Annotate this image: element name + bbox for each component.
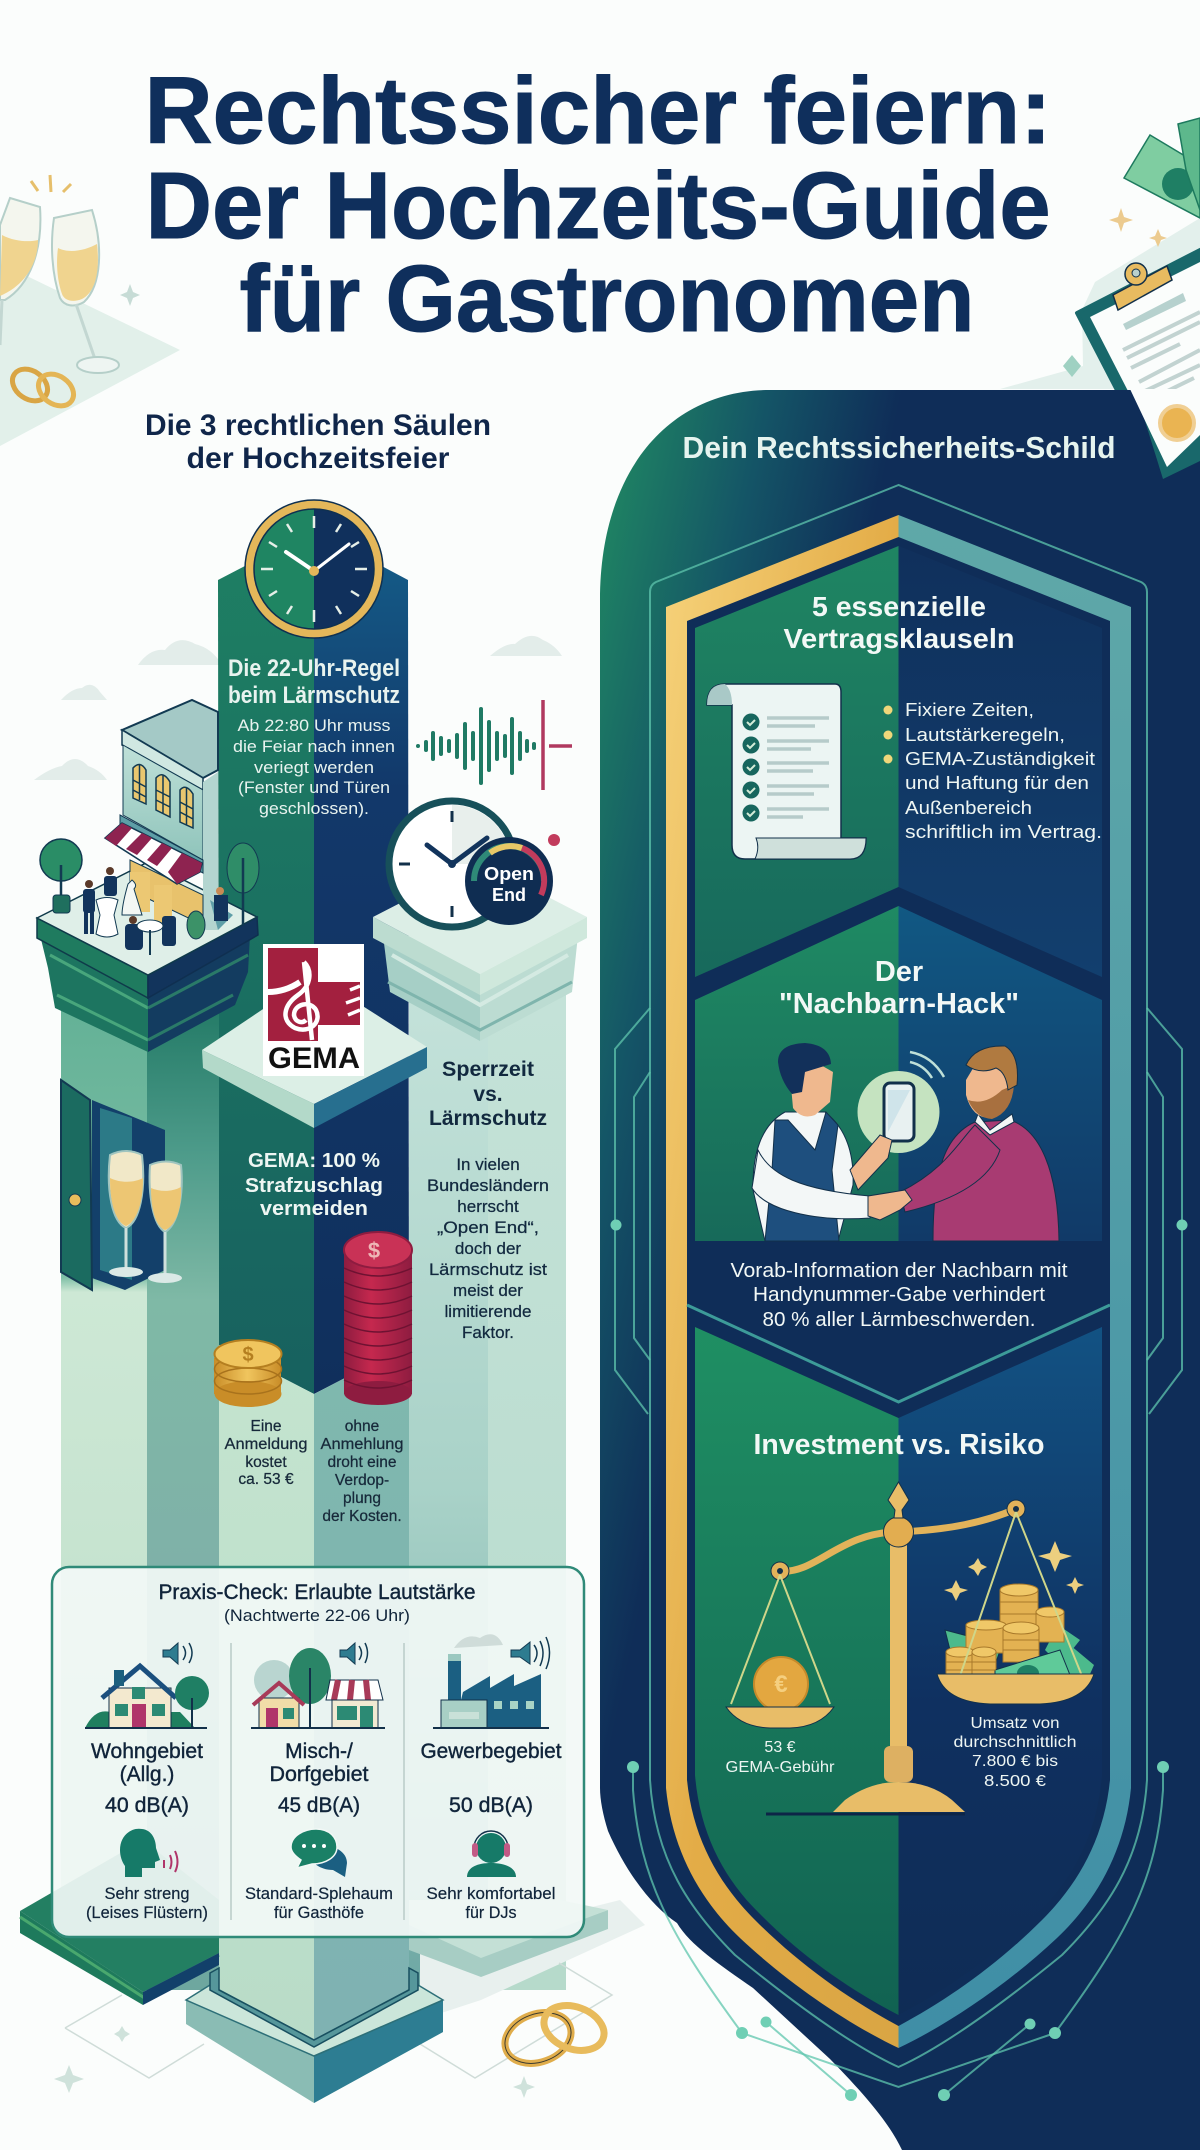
icon: gold coin stack: $	[242, 1344, 254, 1366]
text: area names and limits: für DJs	[466, 1904, 516, 1922]
decoration: champagne glasses and rings top left	[0, 175, 180, 446]
text: Sperrzeit vs. Lärmschutz: doch der	[455, 1239, 521, 1258]
icon: clock with Open End badge: Open	[484, 864, 534, 884]
text: Sperrzeit vs. Lärmschutz: Bundesländern	[427, 1176, 549, 1195]
text: 22-Uhr-Regel: geschlossen).	[259, 799, 369, 818]
text: GEMA Strafzuschlag: GEMA: 100 %	[248, 1150, 380, 1172]
text: area names and limits: 45 dB(A)	[278, 1794, 360, 1817]
text: scale captions: durchschnittlich	[954, 1734, 1076, 1751]
text: section heading: 5 essenzielle	[812, 591, 986, 622]
logo: GEMA	[263, 944, 364, 1076]
text: scale captions	[726, 1715, 1076, 1790]
text: 22-Uhr-Regel: (Fenster und Türen	[238, 778, 390, 797]
pillar: right (Sperrzeit)	[373, 862, 587, 1990]
title	[144, 58, 1052, 352]
shield border: teal right half	[898, 515, 1131, 2048]
text: scale captions: 7.800 € bis	[972, 1753, 1058, 1770]
heading: Rechtssicherheits-Schild: Dein Rechtssicherheits-Schild	[682, 430, 1116, 465]
text: area names and limits: Dorfgebiet	[270, 1763, 369, 1786]
text: coin captions: Anmehlung	[320, 1436, 404, 1453]
heading: three pillars: Die 3 rechtlichen Säulen	[145, 409, 491, 442]
text: area names and limits: Gewerbegebiet	[420, 1740, 562, 1763]
text: clause bullet points: Lautstärkeregeln,	[905, 724, 1065, 745]
text: section heading: "Nachbarn-Hack"	[779, 988, 1019, 1020]
illustration: handshake with neighbor	[752, 1043, 1059, 1241]
text: clause bullet points: Außenbereich	[905, 797, 1032, 818]
illustration: balance scale: €	[774, 1671, 788, 1698]
text: neighbor tip: Handynummer-Gabe verhindert	[753, 1284, 1045, 1306]
text: scale captions: GEMA-Gebühr	[726, 1759, 835, 1776]
heading: Praxis-Check: (Nachtwerte 22-06 Uhr)	[224, 1607, 410, 1625]
text: area names and limits: (Leises Flüstern)	[86, 1904, 208, 1922]
text: coin captions: droht eine	[328, 1454, 396, 1471]
text: GEMA Strafzuschlag: Strafzuschlag	[245, 1175, 383, 1197]
text: Sperrzeit vs. Lärmschutz: Lärmschutz	[429, 1107, 547, 1130]
text: clause bullet points: Fixiere Zeiten,	[905, 699, 1034, 720]
pillar: left with doorway	[37, 862, 258, 1990]
money pile	[944, 1512, 1094, 1695]
clipboard corner overlapping panel	[1130, 389, 1200, 479]
clouds	[34, 636, 562, 780]
shield section: Nachbarn-Hack	[695, 906, 1102, 1331]
text: section heading	[779, 956, 1019, 1020]
logo: GEMA: GEMA	[268, 1042, 360, 1075]
text: clause bullet points: schriftlich im Vertrag.	[905, 821, 1102, 842]
text: coin captions: Eine	[250, 1418, 282, 1435]
shield section: Vertragsklauseln	[695, 546, 1102, 977]
icon: chat bubbles	[291, 1829, 347, 1877]
icon: red coin stack: $	[368, 1238, 380, 1263]
panel: Praxis-Check volume table	[52, 1567, 584, 1937]
text: Sperrzeit vs. Lärmschutz: „Open End“,	[437, 1218, 539, 1237]
text: 22-Uhr-Regel: Die 22-Uhr-Regel	[228, 655, 400, 682]
shield section: Investment vs. Risiko	[695, 1327, 1102, 2015]
text: coin captions: plung	[343, 1490, 381, 1507]
text: Sperrzeit vs. Lärmschutz: Faktor.	[462, 1323, 514, 1342]
text: area names and limits: Sehr komfortabel	[426, 1885, 556, 1903]
circuit lines around the shield	[615, 485, 1182, 2095]
text: clause bullet points: und Haftung für den	[905, 772, 1089, 793]
icon: residential house with tree	[85, 1643, 209, 1728]
text: coin captions: ohne	[345, 1418, 379, 1435]
heading: Praxis-Check: Praxis-Check: Erlaubte Lautstärke	[158, 1581, 476, 1604]
decoration: money and clipboard top right	[1000, 118, 1200, 479]
text: coin captions: kostet	[245, 1454, 287, 1471]
heading: three pillars: der Hochzeitsfeier	[186, 442, 450, 475]
text: coin captions: Verdop-	[335, 1472, 389, 1489]
text: 22-Uhr-Regel: Ab 22:80 Uhr muss	[238, 716, 390, 735]
doorway with door and glasses	[61, 1080, 182, 1290]
text: clause bullet points	[884, 699, 1102, 842]
text: coin captions: ca. 53 €	[238, 1471, 294, 1488]
text: area names and limits: Wohngebiet	[91, 1740, 203, 1763]
text: area names and limits: 50 dB(A)	[449, 1794, 533, 1817]
text: scale captions: Umsatz von	[970, 1715, 1060, 1732]
illustration: restaurant with terrace	[40, 700, 259, 955]
decoration: bottom rings and sparkles	[54, 1998, 610, 2098]
text: section heading	[784, 591, 1014, 654]
text: area names and limits	[86, 1740, 562, 1922]
icon: red coin stack	[344, 1232, 412, 1405]
icon: clock 22 Uhr	[245, 500, 383, 638]
text: coin captions	[224, 1418, 404, 1525]
text: neighbor tip: Vorab-Information der Nachbarn mit	[730, 1260, 1068, 1282]
text: Sperrzeit vs. Lärmschutz: meist der	[453, 1281, 523, 1300]
text: 22-Uhr-Regel	[228, 655, 400, 818]
heading: three pillars	[145, 409, 491, 475]
icon: gold coin stack	[214, 1340, 282, 1407]
text: Sperrzeit vs. Lärmschutz: vs.	[473, 1083, 503, 1106]
text: clause bullet points: GEMA-Zuständigkeit	[905, 748, 1095, 769]
icon: sound wave	[418, 700, 572, 790]
text: 22-Uhr-Regel: veriegt werden	[254, 758, 374, 777]
illustration: GEMA capital	[202, 975, 427, 1128]
heading: Praxis-Check	[158, 1581, 476, 1625]
icon: DJ headset	[467, 1831, 516, 1877]
text: Sperrzeit vs. Lärmschutz	[427, 1058, 549, 1342]
text: coin captions: der Kosten.	[322, 1508, 402, 1525]
text: GEMA Strafzuschlag	[245, 1150, 383, 1220]
shield	[666, 515, 1131, 2048]
text: Sperrzeit vs. Lärmschutz: Lärmschutz ist	[429, 1260, 547, 1279]
icon: whispering head	[120, 1829, 178, 1877]
text: Sperrzeit vs. Lärmschutz: limitierende	[445, 1302, 531, 1321]
text: scale captions: 53 €	[764, 1739, 796, 1756]
panel: Rechtssicherheits-Schild background	[600, 390, 1200, 2150]
circuit nodes	[610, 1220, 1188, 2101]
pillar: center lower	[219, 1345, 409, 2040]
text: Sperrzeit vs. Lärmschutz: In vielen	[456, 1155, 520, 1174]
text: section heading: Investment vs. Risiko	[754, 1429, 1044, 1461]
text: Sperrzeit vs. Lärmschutz: herrscht	[457, 1197, 519, 1216]
title: Rechtssicher feiern:	[144, 58, 1052, 164]
text: area names and limits: Misch-/	[285, 1740, 353, 1763]
text: area names and limits: für Gasthöfe	[274, 1904, 364, 1922]
title: Der Hochzeits-Guide	[146, 153, 1050, 259]
text: section heading: Der	[875, 956, 923, 988]
text: area names and limits: Sehr streng	[104, 1885, 190, 1903]
text: neighbor tip: 80 % aller Lärmbeschwerden.	[762, 1309, 1036, 1331]
text: scale captions: 8.500 €	[984, 1773, 1046, 1790]
text: GEMA Strafzuschlag: vermeiden	[260, 1198, 368, 1220]
text: coin captions: Anmeldung	[224, 1436, 308, 1453]
text: neighbor tip	[730, 1260, 1068, 1331]
text: Sperrzeit vs. Lärmschutz: Sperrzeit	[442, 1058, 534, 1081]
pillar bases	[20, 1840, 645, 2103]
text: 22-Uhr-Regel: die Feiar nach innen	[233, 737, 395, 756]
illustration: balance scale	[726, 1482, 1094, 1814]
icon: mixed area houses	[251, 1643, 385, 1728]
pillar: center upper (22-Uhr-Regel)	[218, 530, 409, 1394]
icon: factory	[433, 1634, 550, 1728]
icon: clock with Open End badge: End	[492, 885, 526, 905]
icon: clock with Open End badge	[389, 801, 560, 927]
text: section heading: Vertragsklauseln	[784, 623, 1014, 654]
text: 22-Uhr-Regel: beim Lärmschutz	[228, 682, 400, 709]
text: area names and limits: (Allg.)	[120, 1763, 174, 1786]
text: area names and limits: 40 dB(A)	[105, 1794, 189, 1817]
icon: contract scroll with checklist	[707, 684, 866, 859]
title: für Gastronomen	[240, 246, 974, 352]
shield border: gold left half	[666, 515, 898, 2048]
text: area names and limits: Standard-Splehaum	[245, 1885, 393, 1903]
